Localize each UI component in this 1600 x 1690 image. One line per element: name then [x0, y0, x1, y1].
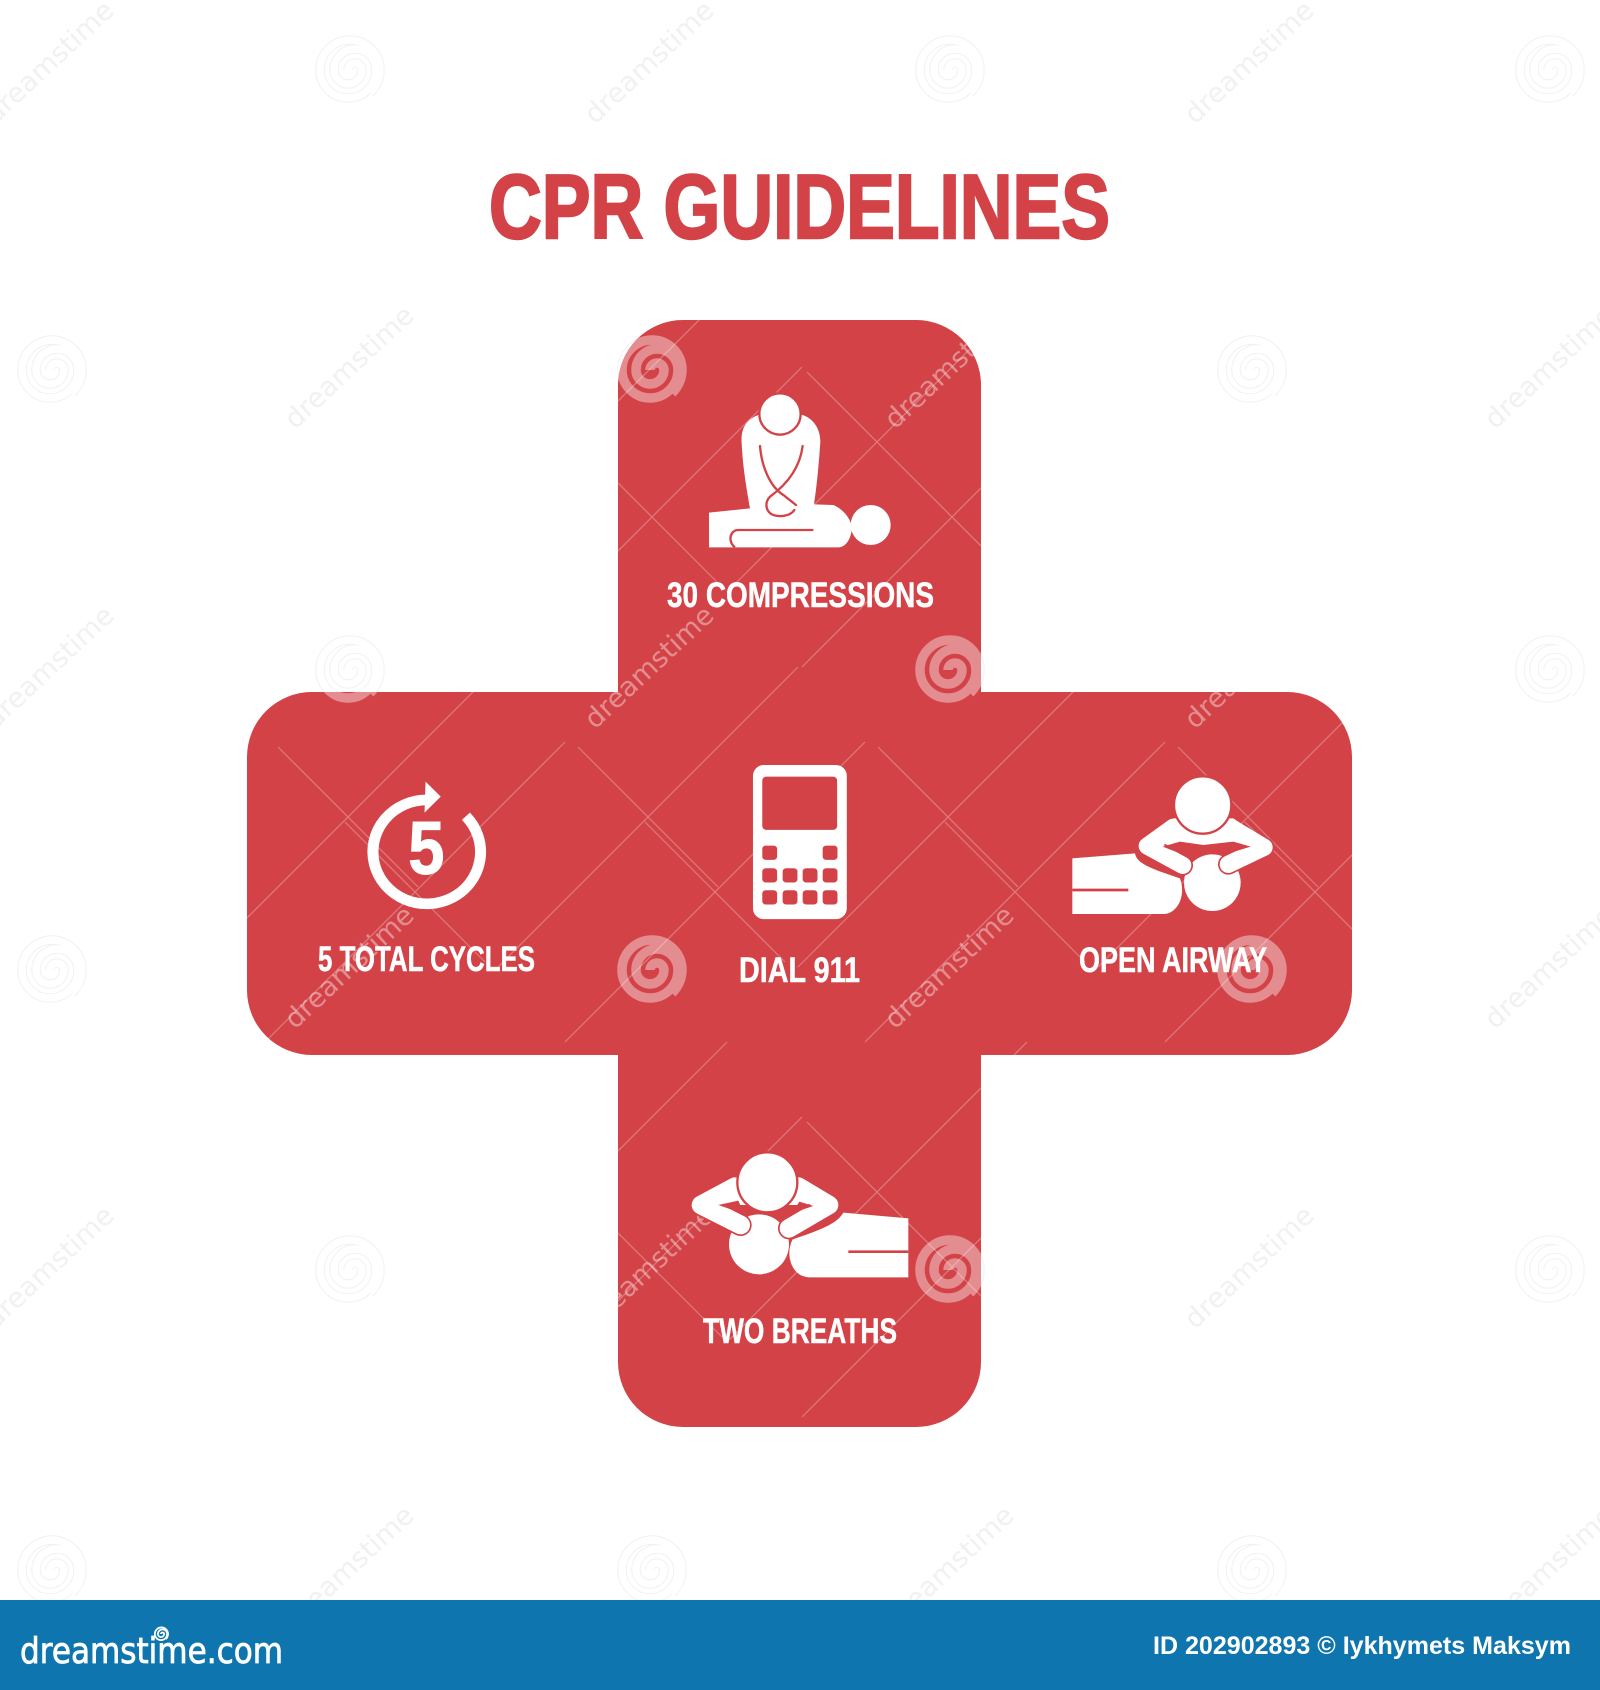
watermark overlay on cross: dreamstime: [879, 900, 1020, 1035]
footer credit: ID 202902893 © Iykhymets Maksym: [1153, 1632, 1571, 1660]
icon: phone: [753, 765, 847, 919]
watermark overlay on cross: [247, 320, 1352, 1418]
icon: open airway: [1072, 776, 1272, 914]
watermark layer on white background: dreamstime: [1179, 0, 1320, 130]
icon: five cycles arrow: [373, 782, 481, 904]
watermark overlay on cross: dreamstime: [579, 1200, 720, 1335]
label: 30 compressions: 30 COMPRESSIONS: [667, 576, 934, 615]
red cross panel: [247, 320, 1352, 1427]
watermark overlay on cross: dreamstime: [279, 900, 420, 1035]
watermark overlay on cross: dreamstime: [879, 300, 1020, 435]
watermark layer on white background: dreamstime: [579, 0, 720, 130]
watermark layer on white background: dreamstime: [279, 1500, 420, 1635]
watermark layer on white background: dreamstime: [279, 300, 420, 435]
watermark layer on white background: dreamstime: [879, 1500, 1020, 1635]
footer logo: dreamstime.com: [20, 1631, 283, 1672]
watermark overlay on cross: dreamstime: [579, 600, 720, 735]
icon: two breaths: [692, 1152, 908, 1277]
label: 5 total cycles: 5 TOTAL CYCLES: [318, 940, 535, 979]
label: open airway: OPEN AIRWAY: [1079, 941, 1267, 980]
label: two breaths: TWO BREATHS: [703, 1312, 897, 1351]
label: dial 911: DIAL 911: [739, 951, 860, 990]
icon: five cycles arrow: 5: [408, 807, 445, 891]
footer bar: [0, 1600, 1600, 1690]
watermark layer on white background: dreamstime: [1179, 1200, 1320, 1335]
icon: chest compressions: [709, 393, 891, 547]
watermark overlay on cross: dreamstime: [1179, 600, 1320, 735]
title: CPR GUIDELINES: [489, 157, 1110, 258]
